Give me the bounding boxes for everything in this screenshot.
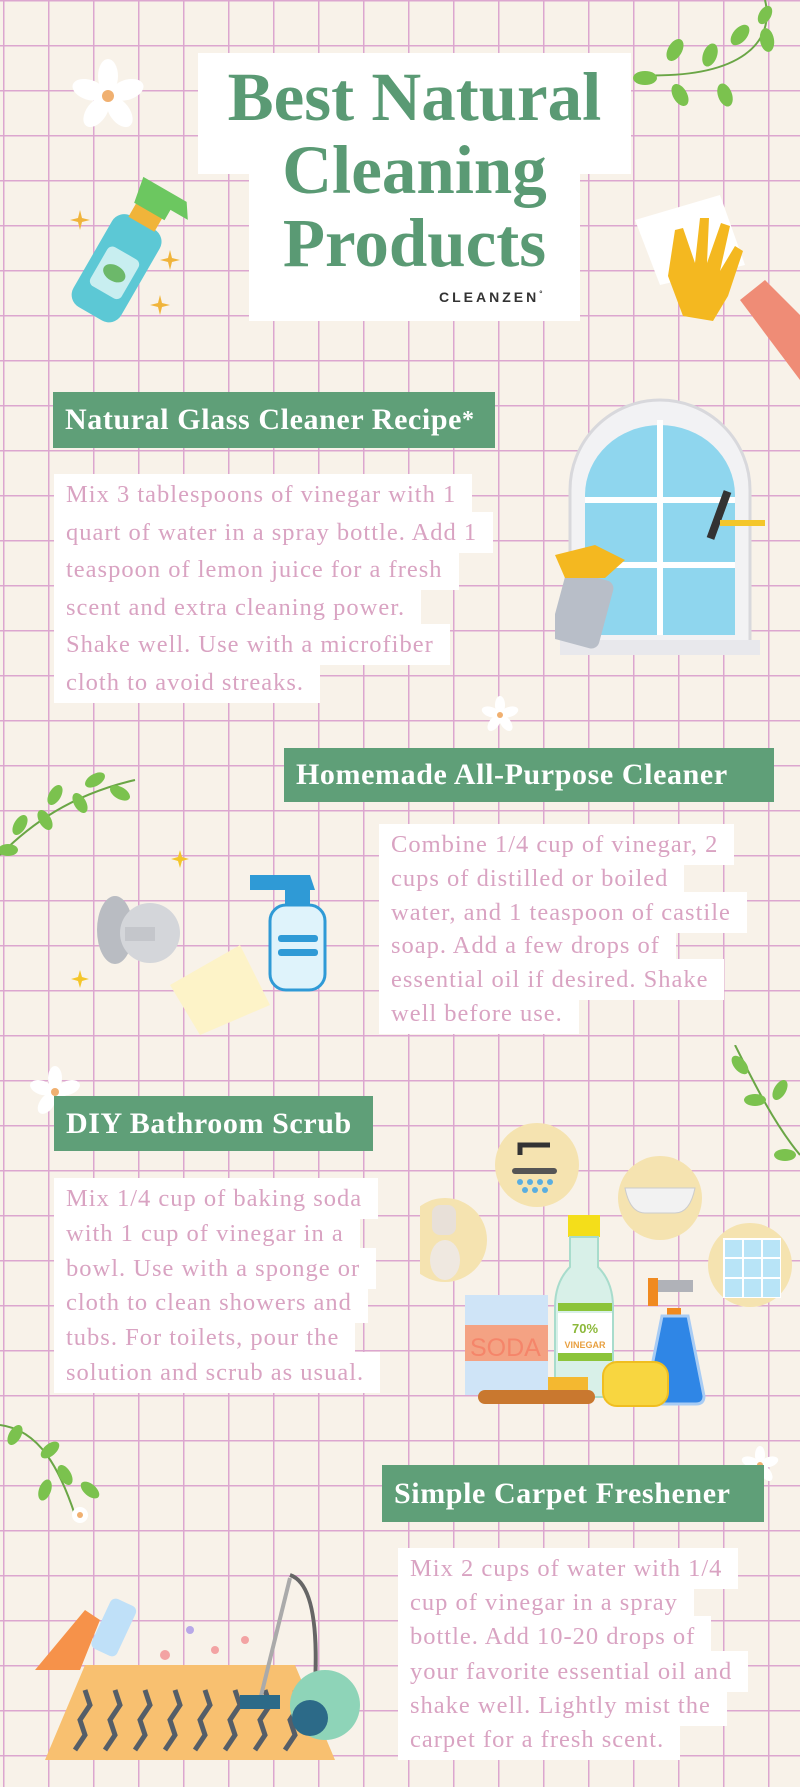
text block: carpet freshener <box>398 1548 748 1760</box>
icon: daisy right of carpet heading <box>742 1446 778 1481</box>
text block: glass cleaner: Shake well. Use with a microfiber <box>66 631 434 658</box>
text block: carpet freshener: bottle. Add 10-20 drops of <box>410 1623 695 1650</box>
text block: bathroom scrub: bowl. Use with a sponge or <box>66 1255 360 1282</box>
icon: shower circle <box>495 1123 579 1207</box>
icon: vinegar bottle: VINEGAR <box>564 1340 606 1350</box>
icon: soda box <box>465 1295 548 1395</box>
icon: vinegar bottle <box>555 1215 613 1397</box>
heading: Natural Glass Cleaner Recipe <box>53 392 495 448</box>
text block: glass cleaner: teaspoon of lemon juice for a fresh <box>66 556 443 583</box>
icon: bathtub circle <box>618 1156 702 1240</box>
heading: Homemade All-Purpose Cleaner: Homemade All-Purpose Cleaner <box>296 758 728 791</box>
text block: bathroom scrub: tubs. For toilets, pour the <box>66 1324 339 1351</box>
heading: Simple Carpet Freshener <box>382 1465 764 1522</box>
heading: DIY Bathroom Scrub <box>54 1096 373 1151</box>
icon: vine top-right <box>633 0 774 106</box>
text block: bathroom scrub <box>54 1178 380 1393</box>
heading: Simple Carpet Freshener: Simple Carpet Freshener <box>394 1476 731 1510</box>
heading: Natural Glass Cleaner Recipe: Natural Glass Cleaner Recipe <box>65 403 462 436</box>
title block <box>198 53 631 321</box>
icon: soda box: SODA <box>470 1334 541 1362</box>
icon: sponge <box>603 1362 668 1406</box>
text block: bathroom scrub: solution and scrub as usual. <box>66 1359 364 1386</box>
icon: small daisy <box>482 696 518 731</box>
heading: Homemade All-Purpose Cleaner <box>284 748 774 802</box>
hand spray <box>35 1610 100 1670</box>
text block: all-purpose cleaner: cups of distilled or boiled <box>391 865 668 892</box>
heading: Natural Glass Cleaner Recipe: * <box>462 406 475 432</box>
text block: all-purpose cleaner: Combine 1/4 cup of vinegar, 2 <box>391 831 718 858</box>
icon: vine bottom-left <box>0 1424 100 1523</box>
text block: bathroom scrub: with 1 cup of vinegar in a <box>66 1220 344 1247</box>
rug <box>45 1665 335 1760</box>
text block: carpet freshener: your favorite essential oil and <box>410 1658 732 1685</box>
text block: bathroom scrub: Mix 1/4 cup of baking soda <box>66 1185 362 1212</box>
text block: glass cleaner: quart of water in a spray bottle. Add 1 <box>66 519 477 546</box>
title text: Best Natural <box>228 59 601 135</box>
icon: spray bottle <box>70 176 188 322</box>
text block: carpet freshener: cup of vinegar in a spray <box>410 1589 678 1616</box>
icon: gloved hand wiping <box>635 195 800 380</box>
text block: bathroom scrub: cloth to clean showers and <box>66 1289 352 1316</box>
text block: glass cleaner: Mix 3 tablespoons of vinegar with 1 <box>66 481 456 508</box>
text block: glass cleaner: cloth to avoid streaks. <box>66 669 304 696</box>
icon: tiles circle <box>708 1223 792 1307</box>
text block: carpet freshener: carpet for a fresh scent. <box>410 1726 664 1753</box>
title text: Cleaning <box>282 132 547 208</box>
icon: daisy top-left <box>72 59 144 127</box>
text block: all-purpose cleaner: water, and 1 teaspoon of castile <box>391 899 731 926</box>
illustration: bathroom supplies <box>420 1123 792 1407</box>
icon: toilet circle <box>403 1198 487 1282</box>
text block: glass cleaner <box>54 474 493 703</box>
title text: Products <box>283 205 546 281</box>
text block: glass cleaner: scent and extra cleaning power. <box>66 594 405 621</box>
icon: spray bottle blue <box>646 1278 704 1404</box>
text block: all-purpose cleaner <box>379 824 747 1034</box>
icon: arched window with spray and squeegee <box>555 398 765 655</box>
icon: vine left <box>0 772 136 856</box>
vacuum <box>290 1575 316 1685</box>
text block: all-purpose cleaner: well before use. <box>391 1000 563 1027</box>
icon: daisy <box>30 1066 80 1114</box>
icon: vinegar bottle: 70% <box>572 1321 598 1336</box>
text block: all-purpose cleaner: essential oil if desired. Shake <box>391 966 708 993</box>
icon: vine right <box>732 1045 800 1161</box>
text block: carpet freshener: Mix 2 cups of water with 1/4 <box>410 1555 722 1582</box>
illustration: vacuum, rug, spray hand <box>35 1573 360 1760</box>
title text <box>228 59 601 281</box>
icon: doorknob, cloth and spray <box>71 850 326 1035</box>
brand: CLEANZEN: CLEANZEN° <box>439 289 542 305</box>
icon: brush <box>478 1377 595 1404</box>
text block: carpet freshener: shake well. Lightly mist the <box>410 1692 711 1719</box>
heading: DIY Bathroom Scrub: DIY Bathroom Scrub <box>66 1106 352 1140</box>
text block: all-purpose cleaner: soap. Add a few drops of <box>391 932 660 959</box>
